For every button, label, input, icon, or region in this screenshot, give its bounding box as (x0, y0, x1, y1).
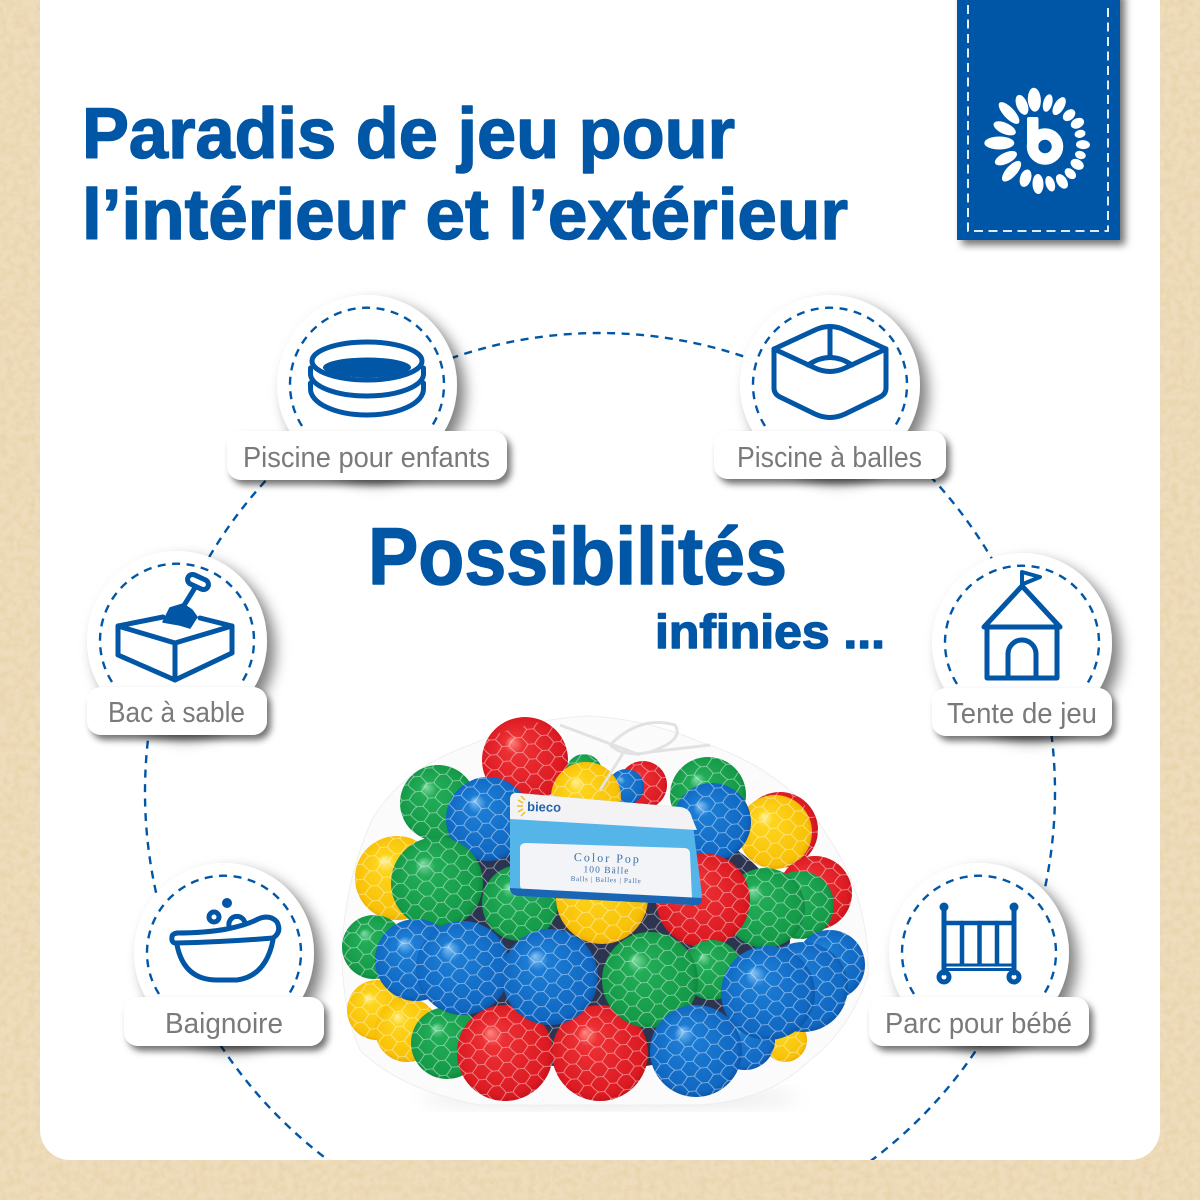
heading: possibilités: Possibilités (368, 512, 787, 602)
icon: ball pit box (774, 326, 886, 418)
icon: sandbox with shovel (118, 573, 232, 680)
icon: bathtub (172, 898, 279, 980)
product name on label (571, 850, 642, 885)
item: piscine à balles (714, 295, 946, 479)
icon: baby crib (939, 902, 1019, 982)
label: Tente de jeu (947, 698, 1097, 730)
product name on label: Balls | Balles | Palle (571, 875, 641, 885)
item: piscine pour enfants (227, 295, 507, 480)
product name on label: 100 Bälle (583, 865, 629, 877)
product: net bag of balls (342, 716, 868, 1110)
subheading: infinies: infinies ... (655, 605, 885, 658)
icon: bieco flower (984, 87, 1090, 194)
item: baignoire (124, 863, 324, 1046)
product name on label: Color Pop (574, 850, 639, 866)
icon: paddling pool (310, 342, 424, 415)
brand on label: bieco (527, 799, 561, 815)
label: Baignoire (165, 1008, 283, 1040)
label: Piscine pour enfants (243, 442, 490, 474)
item: parc pour bébé (869, 863, 1089, 1046)
big dashed circle connecting icons (145, 333, 1055, 1200)
title: l’intérieur et l’extérieur (82, 176, 848, 255)
title (82, 95, 848, 255)
item: tente de jeu (932, 553, 1112, 736)
product label card (510, 793, 702, 905)
title: Paradis de jeu pour (82, 95, 735, 174)
label: Bac à sable (108, 697, 245, 729)
label: Parc pour bébé (885, 1008, 1072, 1040)
logo tag (957, 0, 1120, 240)
sun rays on label (517, 796, 525, 816)
icon: play tent (984, 572, 1060, 678)
label: Piscine à balles (737, 442, 922, 474)
item: bac à sable (87, 551, 267, 735)
